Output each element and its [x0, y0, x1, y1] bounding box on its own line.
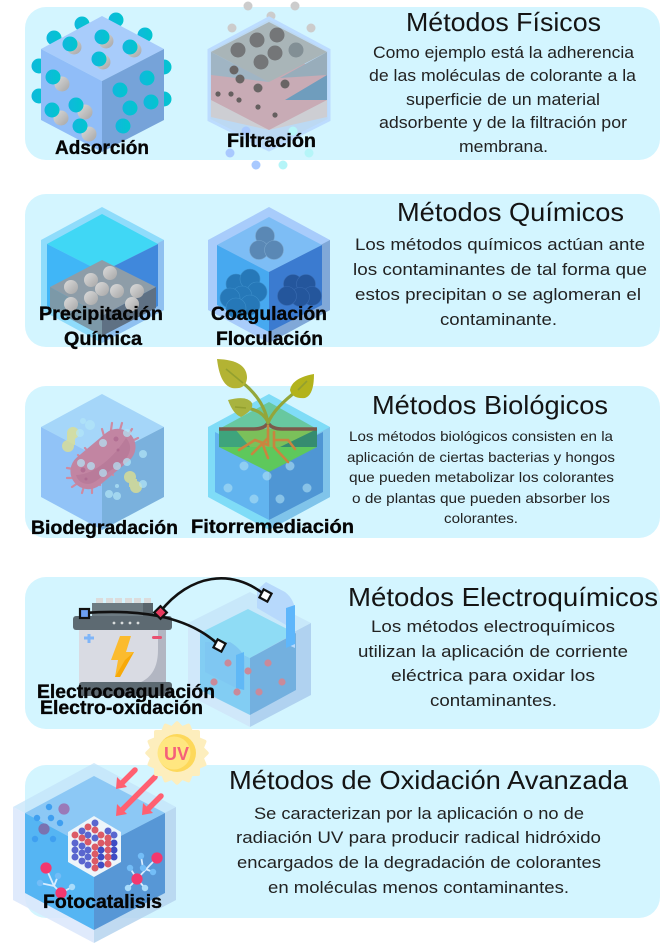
icon: biodegradation cube [41, 394, 164, 530]
body text: Los métodos biológicos consisten en la [349, 428, 613, 444]
heading: Métodos Biológicos [372, 390, 608, 420]
body text: Se caracterizan por la aplicación o no de [254, 805, 584, 823]
heading: Métodos de Oxidación Avanzada [229, 765, 629, 795]
body text: de las moléculas de colorante a la [369, 67, 637, 85]
arrows: UV radiation [116, 770, 161, 816]
panel background [25, 577, 660, 729]
heading: Métodos Físicos [406, 7, 601, 37]
panel: métodos biológicos [25, 359, 660, 539]
icon: UV sun [144, 720, 210, 786]
body text: o de plantas que pueden absorber los [352, 490, 610, 506]
body text: Los métodos electroquímicos [371, 618, 615, 636]
body text: Como ejemplo está la adherencia [373, 44, 635, 62]
body text: aplicación de ciertas bacterias y hongos [347, 449, 615, 465]
body text: membrana. [459, 138, 548, 156]
body text: eléctrica para oxidar los [391, 667, 595, 685]
label: Coagulación Floculación: Floculación [216, 328, 323, 350]
label: Coagulación Floculación: Coagulación [211, 303, 327, 325]
body text: los contaminantes de tal forma que [353, 261, 647, 279]
body text: radiación UV para producir radical hidróxido [236, 829, 601, 847]
icon: wires with terminals [80, 578, 272, 652]
body text: utilizan la aplicación de corriente [358, 643, 628, 661]
panel background [25, 386, 660, 538]
body text [353, 236, 647, 329]
icon: battery [73, 598, 172, 696]
icon: photocatalysis cube [13, 763, 176, 943]
icon: filtration cube [209, 2, 329, 170]
body text: adsorbente y de la filtración por [379, 114, 628, 132]
panel: métodos electroquímicos [25, 577, 660, 729]
icon: coagulation cube [208, 207, 330, 343]
body text [358, 618, 628, 710]
icon: electrochemical tank [188, 582, 311, 727]
icon: UV sun: UV [164, 744, 189, 764]
heading: Métodos Químicos [397, 197, 624, 227]
body text: Los métodos químicos actúan ante [355, 236, 645, 254]
label: Precipitación Química: Precipitación [39, 303, 163, 325]
body text: contaminantes. [430, 692, 557, 710]
icon: adsorption cube [32, 12, 172, 152]
body text [347, 428, 615, 526]
label: Adsorción: Adsorción [55, 137, 149, 159]
icon: precipitation cube [41, 207, 164, 343]
label: Fitorremediación: Fitorremediación [191, 516, 354, 538]
panel background [25, 765, 660, 918]
label: Electrocoagulación: Electrocoagulación [37, 681, 215, 703]
body text: en moléculas menos contaminantes. [268, 879, 569, 897]
body text [369, 44, 637, 156]
panel background [25, 194, 660, 347]
panel background [25, 7, 660, 160]
label: Fotocatalisis: Fotocatalisis [43, 891, 162, 913]
label: Coagulación Floculación [211, 303, 327, 350]
heading: Métodos Electroquímicos [348, 582, 658, 612]
panel: métodos físicos [25, 2, 660, 170]
label: Filtración: Filtración [227, 130, 316, 152]
body text: encargados de la degradación de colorantes [237, 854, 601, 872]
body text: que pueden metabolizar los colorantes [349, 469, 614, 485]
body text: contaminante. [440, 311, 557, 329]
label: Precipitación Química: Química [64, 328, 142, 350]
panel: métodos químicos [25, 194, 660, 350]
icon: phytoremediation cube with plant [208, 359, 330, 530]
body text: superficie de un material [406, 91, 600, 109]
body text: estos precipitan o se aglomeran el [355, 286, 641, 304]
panel: métodos de oxidación avanzada [13, 720, 660, 943]
label: Biodegradación: Biodegradación [31, 517, 178, 539]
label: Precipitación Química [39, 303, 163, 350]
body text: colorantes. [444, 510, 518, 526]
label: Electro-oxidación: Electro-oxidación [40, 697, 203, 719]
body text [236, 805, 601, 897]
